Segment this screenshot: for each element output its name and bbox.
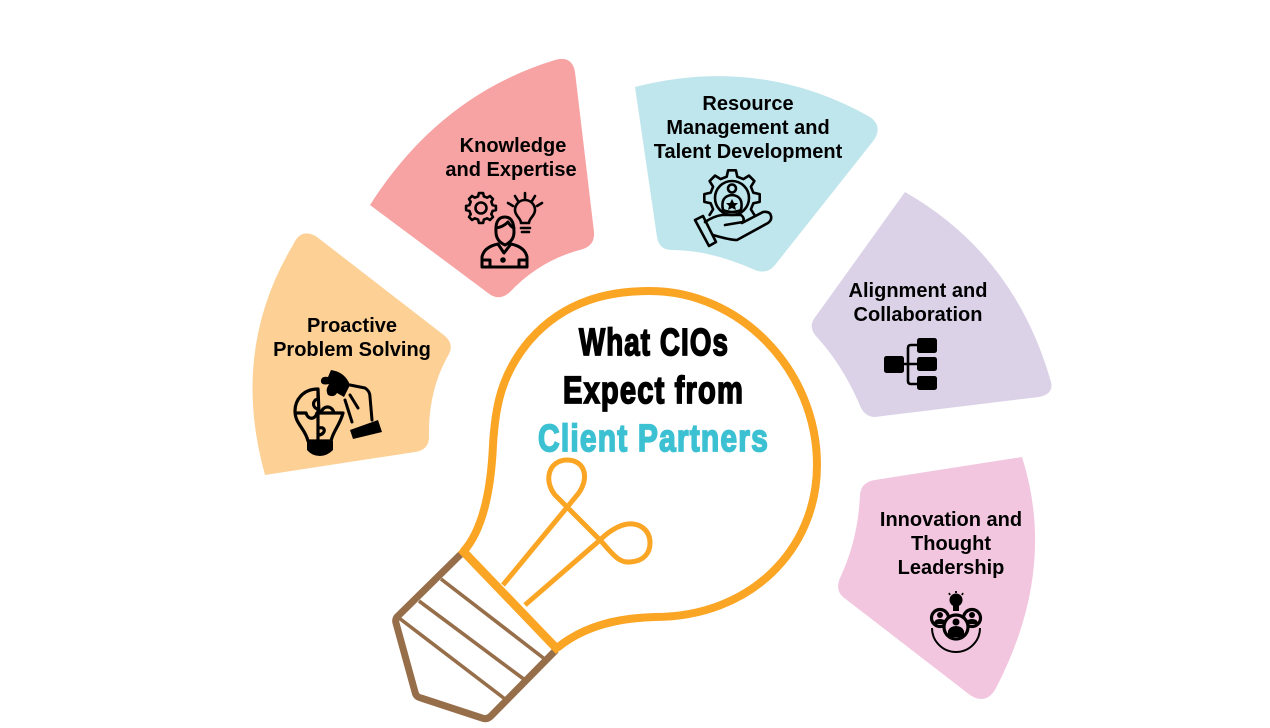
icon: puzzle bulb and hand (295, 370, 382, 456)
panel shape: blue segment (635, 76, 878, 272)
icon: expert with gear and bulb (466, 193, 542, 267)
label: knowledge and expertise: Knowledge (460, 135, 566, 157)
label: innovation and thought leadership: Thought (911, 533, 991, 555)
label: resource management and talent development: Management and (666, 117, 830, 139)
bulb neck line (461, 549, 559, 651)
panel: resource management and talent development (635, 76, 878, 272)
title line: client partners: Client Partners (538, 418, 769, 460)
panel shape: pink segment (838, 457, 1035, 699)
bulb glass outline (463, 291, 817, 648)
light bulb illustration (396, 291, 817, 719)
panel: alignment and collaboration (812, 192, 1052, 417)
label: innovation and thought leadership: Leadership (898, 557, 1004, 579)
panel shape: red segment (370, 59, 594, 297)
bulb filament (503, 460, 650, 605)
icon: hierarchy tree (884, 338, 937, 390)
title (538, 322, 769, 460)
label: proactive problem solving: Proactive (307, 315, 397, 337)
label: resource management and talent development: Resource (702, 93, 794, 115)
label: knowledge and expertise: and Expertise (445, 159, 577, 181)
panel shape: purple segment (812, 192, 1052, 417)
label: alignment and collaboration: Collaboration (854, 304, 982, 326)
icon: team with idea (932, 591, 980, 652)
panel: proactive problem solving (252, 233, 451, 475)
icon: gear with person on hand (695, 170, 771, 246)
panel: innovation and thought leadership (838, 457, 1035, 699)
label: resource management and talent development: Talent Development (654, 141, 843, 163)
label: innovation and thought leadership: Innovation and (880, 509, 1022, 531)
title line: expect from: Expect from (563, 370, 744, 412)
title line: what cios: What CIOs (579, 322, 729, 364)
label: proactive problem solving: Problem Solving (273, 339, 431, 361)
panel shape: orange segment (252, 233, 451, 475)
panel: knowledge and expertise (370, 59, 594, 297)
label: alignment and collaboration: Alignment and (849, 280, 987, 302)
bulb base: brown screw cap (396, 554, 556, 719)
